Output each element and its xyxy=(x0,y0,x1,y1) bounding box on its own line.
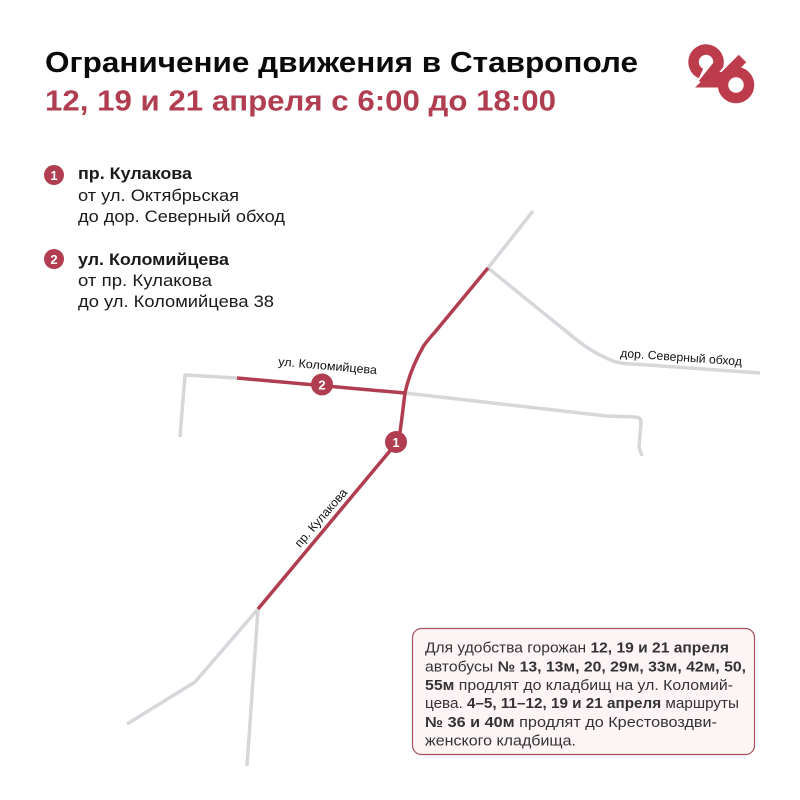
restricted roads xyxy=(237,268,488,609)
map marker 1: 1 xyxy=(392,435,400,450)
title xyxy=(45,47,638,118)
legend text 2: до ул. Коломийцева 38 xyxy=(78,293,274,311)
legend: пр. Кулакова xyxy=(44,165,285,226)
map marker 2 xyxy=(311,374,333,396)
legend marker 2: 2 xyxy=(50,252,58,267)
title: Ограничение движения в Ставрополе xyxy=(45,47,638,79)
legend: ул. Коломийцева xyxy=(44,249,274,311)
callout text: Для удобства горожан 12, 19 и 21 апреля xyxy=(425,640,729,656)
callout text: автобусы № 13, 13м, 20, 29м, 33м, 42м, 50, xyxy=(425,660,746,676)
callout text: 55м продлят до кладбищ на ул. Коломий- xyxy=(425,678,733,694)
legend text 2: от пр. Кулакова xyxy=(78,272,213,290)
legend text 1 xyxy=(78,165,285,226)
map marker 2: 2 xyxy=(318,378,326,392)
map label: пр. Кулакова: пр. Кулакова xyxy=(292,485,350,550)
legend text 1: от ул. Октябрьская xyxy=(78,187,239,205)
legend text 2 xyxy=(78,251,274,311)
callout text: женского кладбища. xyxy=(425,734,576,750)
legend marker 1: 1 xyxy=(50,168,58,183)
legend text 1: пр. Кулакова xyxy=(78,165,193,183)
callout xyxy=(412,628,754,754)
map label: дор. Северный обход: дор. Северный обход xyxy=(620,346,742,369)
map marker 1 xyxy=(385,431,407,453)
legend marker 2 xyxy=(44,249,64,269)
callout text xyxy=(425,640,746,750)
legend text 2: ул. Коломийцева xyxy=(78,251,230,269)
title: 12, 19 и 21 апреля с 6:00 до 18:00 xyxy=(45,86,556,118)
map: road network xyxy=(127,211,760,766)
grey roads xyxy=(127,211,760,766)
map label: ул. Коломийцева: ул. Коломийцева xyxy=(278,355,378,377)
legend text 1: до дор. Северный обход xyxy=(78,208,285,226)
callout text: № 36 и 40м продлят до Крестовоздви- xyxy=(425,715,717,731)
callout text: цева. 4–5, 11–12, 19 и 21 апреля маршруты xyxy=(425,696,739,712)
icon: logo 26 xyxy=(694,50,749,98)
legend marker 1 xyxy=(44,165,64,185)
